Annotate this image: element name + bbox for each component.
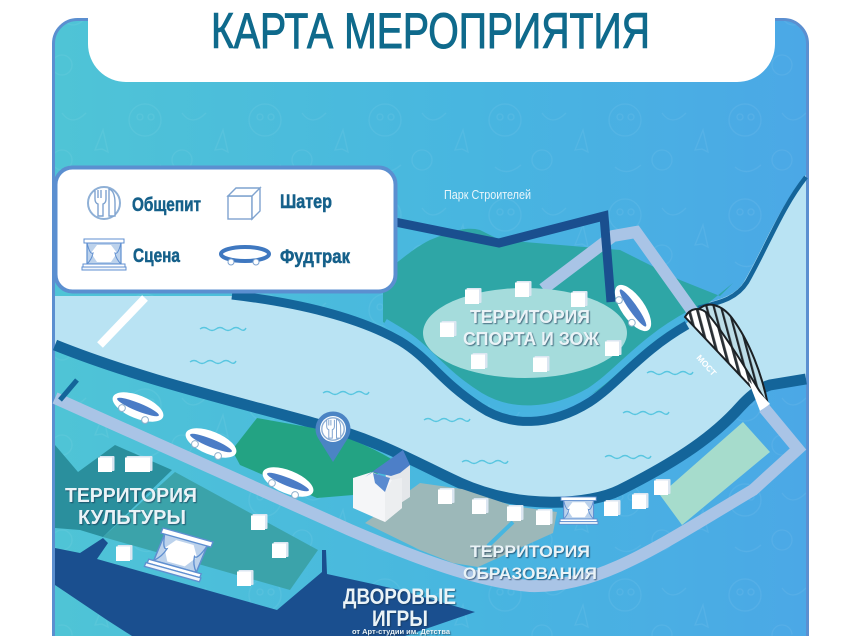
food court green zone — [232, 418, 393, 498]
food trucks — [108, 279, 658, 504]
culture stage — [144, 527, 216, 582]
river waves — [190, 328, 693, 464]
label: sports territory: СПОРТА И ЗОЖ — [463, 329, 600, 349]
label: culture territory — [65, 485, 197, 529]
white road left — [100, 298, 145, 345]
park label: Парк Строителей — [444, 187, 531, 202]
legend icon: canteen — [88, 187, 120, 219]
park boundary line — [395, 216, 611, 302]
legend icon: stage — [82, 239, 126, 270]
culture zone medium — [103, 472, 318, 590]
main walkway — [55, 398, 798, 586]
label: courtyard games — [343, 584, 456, 636]
education zone grey — [365, 483, 557, 567]
upper walkway — [543, 232, 693, 312]
sports island strip — [385, 314, 690, 409]
river bank upper — [232, 295, 687, 421]
education stage — [559, 497, 598, 524]
bridge — [685, 305, 770, 411]
legend text: food truck: Фудтрак — [280, 247, 350, 268]
label: education territory: ТЕРРИТОРИЯ — [470, 542, 590, 561]
building — [353, 450, 410, 522]
courtyard games zone with arrow — [55, 538, 475, 636]
sports island green area — [383, 229, 733, 410]
education zone light green — [660, 422, 770, 525]
dark post at road — [60, 380, 77, 400]
legend text: canteen: Общепит — [132, 195, 201, 216]
legend text: tent: Шатер — [280, 192, 332, 213]
pin: food court — [316, 411, 350, 462]
river bank right — [698, 177, 806, 308]
legend panel — [56, 168, 396, 292]
tents: sports — [440, 281, 622, 372]
river — [55, 175, 806, 502]
culture zone dark — [55, 445, 172, 537]
tents: culture — [98, 456, 288, 586]
river bank lower — [55, 345, 806, 502]
label: culture territory: КУЛЬТУРЫ — [78, 507, 186, 529]
sports zone ellipse — [423, 288, 627, 378]
label: culture territory: ТЕРРИТОРИЯ — [65, 485, 197, 507]
label: sports territory — [463, 307, 600, 349]
legend icon: food truck — [221, 247, 269, 265]
title panel — [88, 0, 775, 82]
legend text: stage: Сцена — [133, 246, 180, 267]
education zone stripe — [488, 522, 513, 546]
label: education territory — [463, 542, 597, 583]
label: courtyard games: ИГРЫ — [372, 606, 428, 631]
legend icon: tent — [228, 188, 260, 219]
label: courtyard games: от Арт-студии им. Детства — [352, 629, 450, 636]
bridge label: МОСТ — [695, 353, 719, 378]
label: sports territory: ТЕРРИТОРИЯ — [470, 307, 590, 327]
title: КАРТА МЕРОПРИЯТИЯ — [211, 3, 650, 59]
tents: education — [438, 479, 670, 525]
label: courtyard games: ДВОРОВЫЕ — [343, 584, 456, 609]
label: education territory: ОБРАЗОВАНИЯ — [463, 564, 597, 583]
